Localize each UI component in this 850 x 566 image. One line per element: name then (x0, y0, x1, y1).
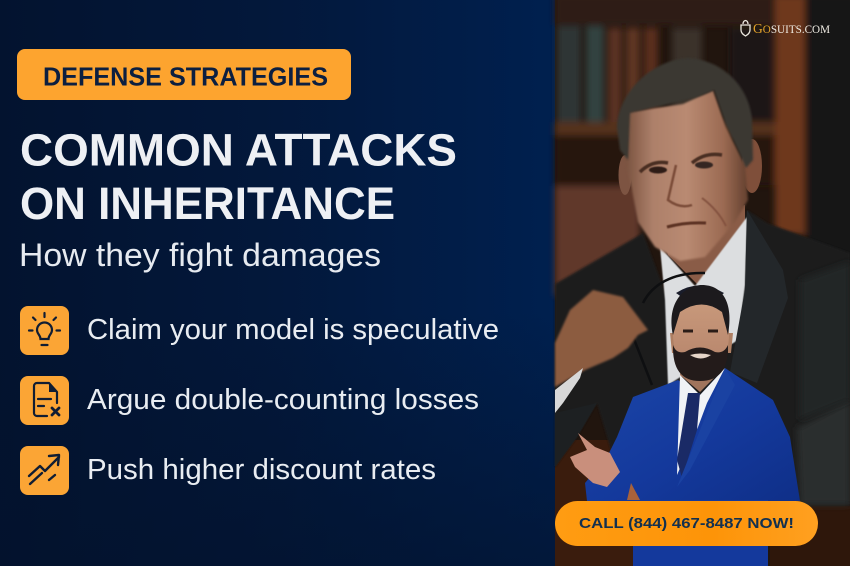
badge: defense strategies: DEFENSE STRATEGIES (43, 62, 328, 92)
call to action button (555, 501, 818, 546)
glasses arm (632, 273, 705, 385)
lower right table (770, 506, 850, 566)
icon: shield keyhole (741, 21, 750, 36)
pointing hand (570, 433, 620, 487)
left ear (618, 155, 632, 195)
icon: light bulb (20, 306, 69, 355)
jacket sleeve left (555, 403, 597, 467)
eyes and brows (640, 154, 722, 174)
ears (670, 333, 733, 353)
shirt (660, 217, 747, 385)
hand (555, 290, 648, 387)
list item: double-counting: Argue double-counting losses (87, 384, 479, 416)
list item: discount rates (20, 446, 436, 495)
list item: discount rates: Push higher discount rates (87, 454, 436, 486)
neck (680, 355, 724, 392)
face (673, 297, 729, 373)
logo: gosuits: GOSUITS.COM (753, 22, 830, 37)
photo: serious attorney with glasses (555, 58, 850, 515)
subtitle: How they fight damages (19, 237, 381, 273)
right lapel (730, 210, 788, 383)
hair (617, 58, 753, 168)
beard (673, 345, 728, 381)
photo: attorney in blue suit (570, 285, 800, 566)
eyes (683, 330, 718, 332)
badge: defense strategies (17, 49, 351, 100)
tie (676, 286, 724, 300)
call to action button: CALL (844) 467-8487 NOW! (579, 515, 794, 532)
list item: speculative model: Claim your model is speculative (87, 314, 499, 346)
right sleeve (797, 400, 850, 505)
nose and mouth (667, 165, 726, 227)
right lapel (677, 368, 735, 487)
title (20, 124, 457, 229)
lower left floor (555, 440, 635, 566)
gap of floor beside arm (627, 483, 640, 500)
panel: office photo background (555, 0, 850, 566)
neck (660, 205, 745, 287)
list item: double-counting (20, 376, 479, 425)
face (626, 90, 748, 261)
lower body (633, 500, 768, 566)
icon: rising arrows (20, 446, 69, 495)
right ear (742, 139, 762, 193)
right chest shading (800, 262, 850, 420)
title: ON INHERITANCE (20, 178, 395, 229)
blue suit (585, 368, 800, 501)
panel: navy text background (0, 0, 555, 566)
icon: document with x (20, 376, 69, 425)
title: COMMON ATTACKS (20, 124, 457, 176)
shirt cuff (555, 368, 583, 413)
shirt and tie (677, 368, 725, 475)
list item: speculative model (20, 306, 499, 355)
smile (690, 354, 711, 358)
suit (555, 210, 850, 515)
hair (672, 285, 730, 335)
